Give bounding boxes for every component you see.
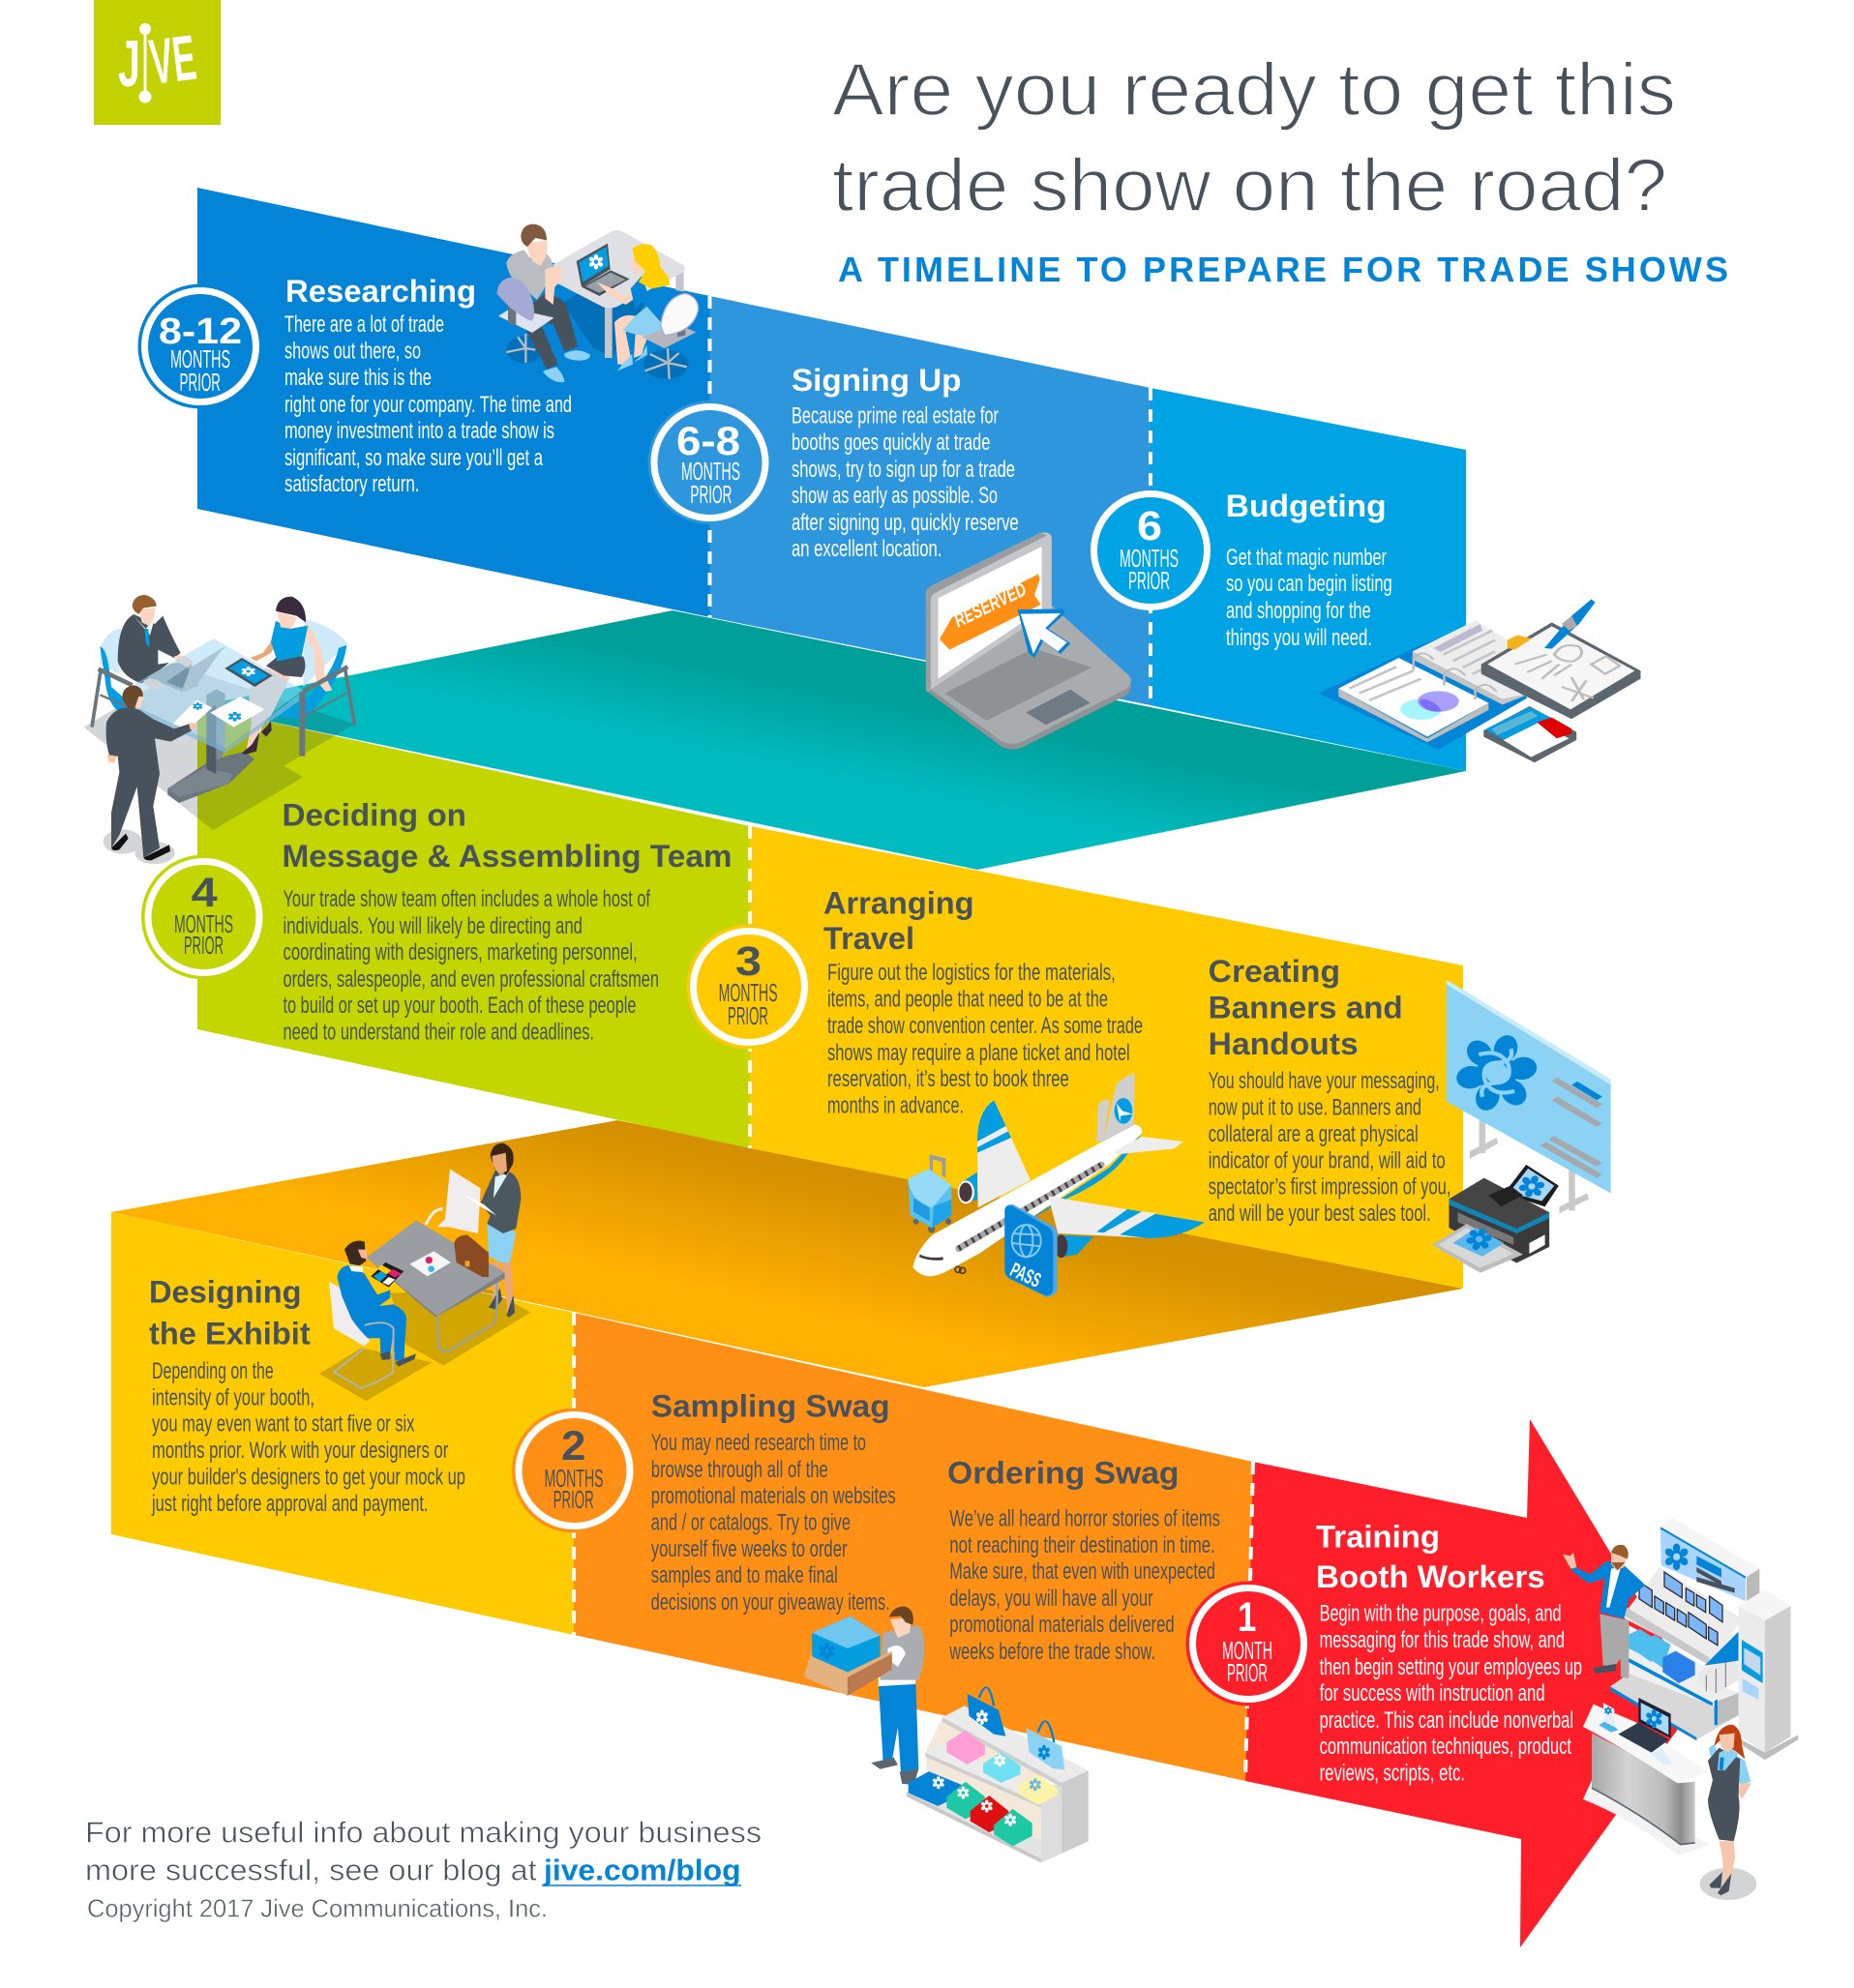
body text: spectator’s first impression of you,	[1209, 1174, 1451, 1201]
body text	[1209, 1068, 1451, 1227]
heading: Budgeting	[1226, 489, 1387, 523]
badge: 8-12 months prior: 8-12	[159, 312, 242, 352]
badge: 6 months prior: 6	[1137, 503, 1162, 549]
body text: now put it to use. Banners and	[1209, 1095, 1421, 1120]
heading	[283, 798, 732, 874]
body text: collateral are a great physical	[1209, 1121, 1419, 1147]
body text: browse through all of the	[651, 1457, 828, 1483]
body text: months in advance.	[827, 1092, 964, 1118]
footer text: more successful, see our blog at	[85, 1854, 537, 1887]
body text: to build or set up your booth. Each of these people	[283, 993, 637, 1019]
heading: Sampling Swag	[651, 1389, 890, 1424]
heading: the Exhibit	[149, 1317, 311, 1351]
body text: and shopping for the	[1226, 598, 1371, 624]
body text: months prior. Work with your designers or	[152, 1438, 448, 1464]
body text	[283, 886, 659, 1045]
heading	[1209, 954, 1403, 1061]
illustration: team meeting at glass table	[84, 595, 355, 864]
body text: Begin with the purpose, goals, and	[1320, 1601, 1562, 1627]
body text	[284, 312, 572, 497]
badge: 6 months prior	[1091, 490, 1211, 610]
body text: your builder's designers to get your mock up	[152, 1464, 465, 1490]
badge: 4 months prior: MONTHS	[174, 909, 233, 938]
logo: J	[118, 27, 140, 101]
title: Are you ready to get this	[832, 48, 1676, 132]
callout: researching	[137, 274, 572, 497]
body text: delays, you will have all your	[949, 1586, 1153, 1612]
body text: shows out there, so	[284, 339, 421, 364]
body text: and / or catalogs. Try to give	[651, 1510, 851, 1536]
body text: Get that magic number	[1226, 545, 1387, 571]
body text: and will be your best sales tool.	[1209, 1201, 1431, 1227]
body text: significant, so make sure you’ll get a	[284, 445, 543, 471]
badge: 6-8 months prior: PRIOR	[690, 480, 732, 509]
body text	[792, 402, 1019, 562]
body text: We’ve all heard horror stories of items	[949, 1505, 1220, 1532]
badge: 6-8 months prior: MONTHS	[681, 457, 740, 486]
body text: an excellent location.	[792, 536, 942, 562]
heading: Travel	[823, 921, 914, 956]
body text: messaging for this trade show, and	[1320, 1627, 1565, 1653]
badge: 2 months prior: 2	[561, 1423, 585, 1469]
footer text	[85, 1816, 762, 1923]
body text: decisions on your giveaway items.	[651, 1589, 890, 1616]
illustration: airplane, suitcase and passport: PASS	[1006, 1259, 1044, 1292]
badge: 8-12 months prior: PRIOR	[180, 368, 221, 397]
body text: items, and people that need to be at the	[827, 987, 1108, 1013]
callout: training booth workers	[1186, 1520, 1582, 1787]
heading: Banners and	[1209, 991, 1403, 1025]
callout: signing up	[648, 363, 1019, 562]
callout: designing the exhibit	[149, 1274, 465, 1517]
badge: 4 months prior: 4	[192, 870, 218, 916]
badge: 2 months prior	[512, 1409, 637, 1532]
illustration: designers at exhibit table	[319, 1143, 530, 1401]
body text: so you can begin listing	[1226, 571, 1392, 597]
body text: show as early as possible. So	[792, 483, 998, 509]
body text	[1226, 545, 1392, 651]
body text: reviews, scripts, etc.	[1320, 1761, 1465, 1787]
heading: Message & Assembling Team	[283, 839, 732, 874]
body text: indicator of your brand, will aid to	[1209, 1147, 1446, 1174]
body text: There are a lot of trade	[284, 312, 444, 338]
body text	[651, 1430, 896, 1616]
badge: 6-8 months prior	[648, 401, 772, 524]
illustration: banner and printer	[1432, 980, 1611, 1273]
footer text: For more useful info about making your business	[85, 1816, 762, 1850]
body text: booths goes quickly at trade	[792, 430, 990, 456]
badge: 1 month prior	[1186, 1581, 1310, 1706]
body text: make sure this is the	[284, 365, 432, 391]
subtitle: A TIMELINE TO PREPARE FOR TRADE SHOWS	[838, 250, 1728, 289]
badge: 6 months prior: PRIOR	[1128, 566, 1170, 595]
body text: coordinating with designers, marketing personnel,	[283, 939, 638, 965]
body text: communication techniques, product	[1320, 1734, 1571, 1760]
illustration: researchers at desk	[496, 224, 699, 382]
heading: Training	[1316, 1520, 1440, 1555]
footer text: jive.com/blog	[543, 1854, 741, 1887]
heading: Ordering Swag	[947, 1456, 1179, 1491]
body text: You should have your messaging,	[1209, 1068, 1440, 1094]
body text: things you will need.	[1226, 625, 1372, 651]
body text: after signing up, quickly reserve	[792, 510, 1019, 536]
band: arranging travel and banners	[750, 826, 1463, 1289]
callout: ordering swag	[947, 1456, 1220, 1665]
callout: arranging travel	[687, 886, 1143, 1118]
heading	[149, 1274, 311, 1351]
band: researching	[197, 188, 710, 617]
badge: 1 month prior: 1	[1238, 1594, 1256, 1641]
title	[832, 48, 1676, 227]
heading: Deciding on	[283, 798, 466, 833]
badge: 1 month prior: MONTH	[1222, 1636, 1272, 1665]
body text: Your trade show team often includes a whole host of	[283, 886, 650, 912]
heading: Signing Up	[792, 363, 962, 398]
heading: Booth Workers	[1316, 1559, 1545, 1594]
body text: You may need research time to	[651, 1430, 866, 1456]
badge: 3 months prior	[687, 925, 811, 1049]
body text: promotional materials on websites	[651, 1483, 896, 1509]
body text: yourself five weeks to order	[651, 1536, 848, 1562]
body text	[1320, 1601, 1582, 1787]
body text: practice. This can include nonverbal	[1320, 1707, 1573, 1734]
body text	[827, 960, 1143, 1118]
body text: money investment into a trade show is	[284, 418, 554, 444]
badge: 6 months prior: MONTHS	[1120, 544, 1179, 573]
badge: 2 months prior: MONTHS	[544, 1464, 604, 1493]
body text: Figure out the logistics for the materials,	[827, 960, 1116, 986]
body text	[949, 1505, 1220, 1665]
band: signing up	[710, 296, 1151, 705]
body text: Depending on the	[152, 1358, 274, 1384]
body text: individuals. You will likely be directing and	[283, 913, 583, 939]
callout: budgeting	[1091, 489, 1392, 651]
body text: promotional materials delivered	[949, 1612, 1175, 1638]
body text: satisfactory return.	[284, 471, 420, 497]
body text: Because prime real estate for	[792, 402, 999, 430]
body text: then begin setting your employees up	[1320, 1654, 1582, 1680]
heading: Researching	[285, 274, 476, 309]
badge: 3 months prior: MONTHS	[719, 978, 778, 1007]
body text: intensity of your booth,	[152, 1385, 314, 1411]
heading: Arranging	[823, 886, 973, 921]
illustration: airplane, suitcase and passport	[908, 1073, 1205, 1297]
badge: 2 months prior: PRIOR	[553, 1485, 594, 1514]
body text: for success with instruction and	[1320, 1680, 1545, 1706]
floor: teal connector	[197, 610, 1466, 870]
heading	[1316, 1520, 1545, 1594]
illustration: budget documents and calculator	[1319, 599, 1641, 762]
illustration: man carrying swag box	[805, 1607, 924, 1785]
body text: weeks before the trade show.	[949, 1639, 1155, 1665]
band: swag	[574, 1313, 1253, 1781]
callout: deciding on message and assembling team	[141, 798, 732, 1045]
body text: trade show convention center. As some trade	[827, 1013, 1143, 1039]
heading: Handouts	[1209, 1026, 1359, 1061]
illustration: trade show booth with staff	[1563, 1518, 1798, 1900]
band: designing the exhibit	[111, 1212, 574, 1635]
illustration: laptop with reserved banner	[926, 532, 1131, 750]
heading	[823, 886, 973, 956]
arrow: training booth workers	[1245, 1419, 1699, 1947]
badge: 3 months prior: 3	[735, 938, 762, 985]
logo	[94, 0, 221, 125]
body text: samples and to make final	[651, 1562, 838, 1588]
band: deciding on message	[197, 706, 750, 1148]
illustration: swag shelf	[907, 1687, 1089, 1862]
body text: need to understand their role and deadlines.	[283, 1020, 594, 1045]
body text: orders, salespeople, and even professional craftsmen	[283, 966, 659, 993]
title: trade show on the road?	[832, 144, 1667, 227]
body text: reservation, it’s best to book three	[827, 1066, 1069, 1092]
badge: 8-12 months prior: MONTHS	[170, 344, 230, 373]
body text: shows, try to sign up for a trade	[792, 457, 1015, 483]
badge: 4 months prior: PRIOR	[184, 931, 224, 960]
band: budgeting	[1151, 388, 1466, 771]
floor: amber connector	[111, 1120, 1463, 1387]
logo: VE	[146, 21, 199, 98]
body text: right one for your company. The time and	[284, 392, 572, 418]
badge: 1 month prior: PRIOR	[1227, 1658, 1268, 1687]
badge: 3 months prior: PRIOR	[728, 1001, 768, 1030]
callout: creating banners and handouts	[1209, 954, 1451, 1227]
body text: Make sure, that even with unexpected	[949, 1558, 1215, 1585]
footer text: Copyright 2017 Jive Communications, Inc.	[87, 1894, 548, 1923]
body text: not reaching their destination in time.	[949, 1532, 1215, 1558]
heading: Designing	[149, 1274, 302, 1309]
badge: 8-12 months prior	[137, 284, 263, 408]
body text: shows may require a plane ticket and hotel	[827, 1040, 1130, 1066]
body text	[151, 1358, 465, 1517]
illustration: laptop with reserved banner: RESERVED	[951, 579, 1030, 632]
badge: 4 months prior	[141, 855, 266, 979]
body text: just right before approval and payment.	[151, 1491, 428, 1517]
badge: 6-8 months prior: 6-8	[676, 418, 740, 463]
heading: Creating	[1209, 954, 1340, 989]
body text: you may even want to start five or six	[152, 1411, 414, 1438]
callout: sampling swag	[512, 1389, 896, 1616]
